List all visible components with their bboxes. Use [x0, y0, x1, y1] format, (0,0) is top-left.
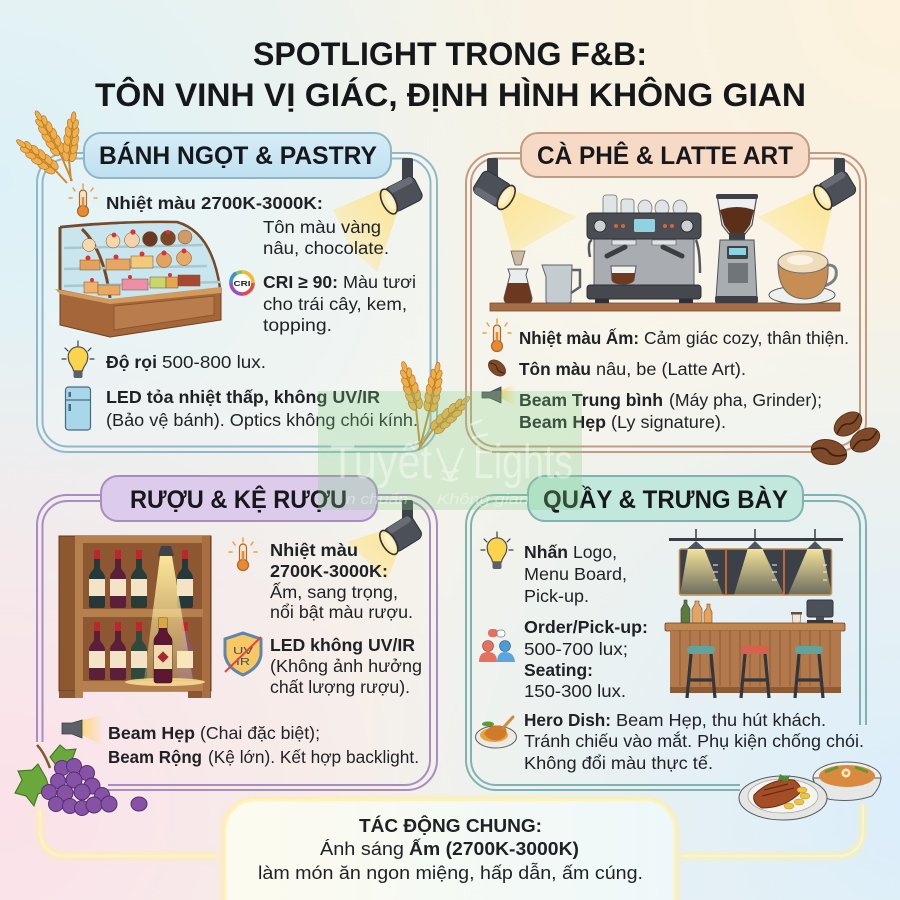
illustration: pastry display case [55, 222, 221, 337]
text: độ rọi: Độ rọi [106, 352, 157, 372]
bottles [681, 600, 712, 623]
text: nhiệt màu: Ấm, sang trọng, [270, 581, 398, 602]
text: beam [108, 723, 419, 767]
icon: wheat top left [11, 107, 83, 183]
icon: hero dish [476, 717, 516, 748]
stools [687, 646, 715, 698]
text: tác động chung: TÁC ĐỘNG CHUNG: [359, 815, 542, 836]
watermark: n chuẩn [346, 491, 408, 508]
icon: bulb [481, 532, 513, 569]
spotlight [377, 158, 424, 217]
latte cup [769, 251, 836, 304]
text: beam: (Máy pha, Grinder); [669, 390, 822, 410]
panel: bánh ngọt & pastry [37, 133, 437, 452]
text: tác động chung: Ánh sáng [320, 838, 404, 859]
text: độ rọi: 500-800 lux. [162, 352, 266, 372]
heading: BÁNH NGỌT & PASTRY [99, 141, 377, 170]
text: CRI: cho trái cây, kem, [263, 294, 407, 314]
icon: coffee bean [485, 357, 509, 379]
text: nhiệt màu [270, 540, 413, 622]
text: nhiệt màu ấm: Nhiệt màu Ấm: [519, 327, 639, 348]
title: TÔN VINH VỊ GIÁC, ĐỊNH HÌNH KHÔNG GIAN [95, 77, 806, 113]
rail [669, 538, 843, 541]
text: tác động chung [258, 815, 643, 883]
icon: beam flashlight [482, 384, 516, 406]
text: order: 500-700 lux; [524, 639, 628, 659]
icon: fridge [66, 387, 90, 430]
watermark: Tuyết [330, 436, 432, 489]
illustration: wine shelf [59, 536, 211, 698]
shelf [490, 303, 840, 311]
text: nhấn logo: Logo, [573, 542, 617, 562]
text: CRI: CRI ≥ 90: [263, 272, 338, 292]
panel: cà phê & latte art [466, 133, 884, 468]
watermark: Lights [473, 436, 573, 489]
text: LED: LED không UV/IR [270, 635, 415, 655]
text: beam: Beam Trung bình [519, 390, 663, 410]
panel: rượu & kệ rượu [37, 476, 437, 790]
heading [528, 476, 803, 521]
text: tác động chung: làm món ăn ngon miệng, hấp dẫn, ấm cúng. [258, 862, 643, 883]
text: order [524, 617, 648, 701]
register [791, 600, 833, 623]
text: nhấn logo [524, 542, 627, 606]
text: order: 150-300 lux. [524, 681, 626, 701]
icon: coffee beans [809, 407, 884, 468]
text: LED [270, 635, 422, 697]
spotlight right [810, 158, 858, 212]
text: LED: (Không ảnh hưởng [270, 656, 422, 676]
chemex [504, 251, 532, 303]
heading [84, 133, 391, 178]
icon: thermometer [69, 184, 97, 216]
pendant beams [680, 548, 832, 595]
icon: thermometer [229, 538, 257, 570]
espresso machine [587, 195, 701, 303]
counter [665, 623, 845, 631]
icon: UV shield: UV [233, 645, 253, 657]
panel: tác động chung [225, 800, 675, 900]
spotlight beam [333, 190, 397, 272]
text: hero dish [524, 710, 864, 773]
spotlight [376, 500, 424, 557]
text: nhiệt màu: 2700K-3000K: [270, 561, 388, 581]
text: nhiệt màu: nổi bật màu rượu. [270, 602, 413, 622]
text: nhiệt màu: Tôn màu vàng [263, 217, 381, 237]
icon: CRI ring [231, 272, 253, 294]
menu board [680, 549, 832, 595]
text: beam: Beam Rộng [108, 747, 202, 767]
text: LED: LED tỏa nhiệt thấp, không UV/IR [106, 387, 380, 407]
text: beam: Beam Hẹp [108, 723, 195, 743]
text: beam: Beam Hẹp [519, 412, 606, 432]
icon: people [479, 629, 515, 662]
spotlight left [471, 158, 519, 212]
text: nhiệt màu ấm [519, 327, 849, 348]
text: tôn màu: Tôn màu [519, 359, 591, 379]
text: nhiệt màu: nâu, chocolate. [263, 238, 389, 258]
text: độ rọi [106, 352, 266, 372]
text: hero dish: Hero Dish: [524, 710, 611, 730]
heading [521, 133, 809, 177]
icon: UV shield: IR [236, 656, 251, 668]
text: LED: (Bảo vệ bánh). Optics không chói kính. [106, 410, 418, 430]
spotlight beam [347, 532, 397, 580]
text: nhiệt màu: Nhiệt màu [270, 540, 358, 560]
title [95, 36, 806, 113]
illustration: counter [665, 529, 845, 698]
milk pitcher [542, 265, 580, 303]
text: LED [106, 387, 418, 430]
heading [101, 476, 377, 521]
icon: wheat mid [395, 359, 475, 450]
text: hero dish: Không đổi màu thực tế. [524, 753, 713, 773]
text: nhiệt màu: Nhiệt màu 2700K-3000K: [106, 193, 323, 213]
text: hero dish: Tránh chiếu vào mắt. Phụ kiện chống chói. [524, 730, 864, 751]
text: beam: (Chai đặc biệt); [200, 723, 320, 743]
text: nhấn logo: Nhấn [524, 542, 568, 562]
text: tôn màu: nâu, be (Latte Art). [596, 359, 746, 379]
text: beam [519, 390, 822, 432]
text: nhấn logo: Menu Board, [524, 564, 627, 584]
watermark: Không gian [437, 491, 529, 508]
text: order: Order/Pick-up: [524, 617, 648, 637]
icon: bulb [62, 341, 94, 378]
text: beam: (Ly signature). [611, 412, 726, 432]
text: nhiệt màu [106, 193, 389, 258]
grinder [715, 194, 758, 303]
text: tác động chung: Ấm (2700K-3000K) [409, 838, 579, 859]
text: nhấn logo: Pick-up. [524, 586, 589, 606]
text: CRI: topping. [263, 315, 332, 335]
heading: RƯỢU & KỆ RƯỢU [130, 484, 347, 514]
icon: thermometer [483, 319, 511, 352]
watermark [318, 391, 582, 510]
icon: beam flashlight [62, 715, 103, 746]
icon: CRI ring: CRI [234, 279, 250, 288]
text: nhiệt màu ấm: Cảm giác cozy, thân thiện. [644, 328, 849, 348]
illustration: coffee bar [490, 194, 840, 311]
bottom connector glow [40, 805, 863, 856]
spotlight beams [500, 192, 832, 260]
illustration: dishes [739, 762, 881, 820]
text: CRI: Màu tươi [343, 272, 416, 292]
heading: CÀ PHÊ & LATTE ART [537, 140, 793, 170]
text: LED: chất lượng rượu). [270, 677, 410, 697]
text: beam: (Kệ lớn). Kết hợp backlight. [208, 747, 419, 767]
heading: QUẦY & TRƯNG BÀY [543, 485, 788, 514]
text: CRI [263, 272, 416, 335]
title: SPOTLIGHT TRONG F&B: [253, 36, 647, 72]
text: tôn màu [519, 359, 746, 379]
icon: UV shield [225, 633, 261, 675]
icon: grapes [15, 745, 147, 816]
text: hero dish: Beam Hẹp, thu hút khách. [616, 710, 826, 730]
panel: quầy & trưng bày [466, 476, 866, 790]
text: order: Seating: [524, 660, 593, 680]
